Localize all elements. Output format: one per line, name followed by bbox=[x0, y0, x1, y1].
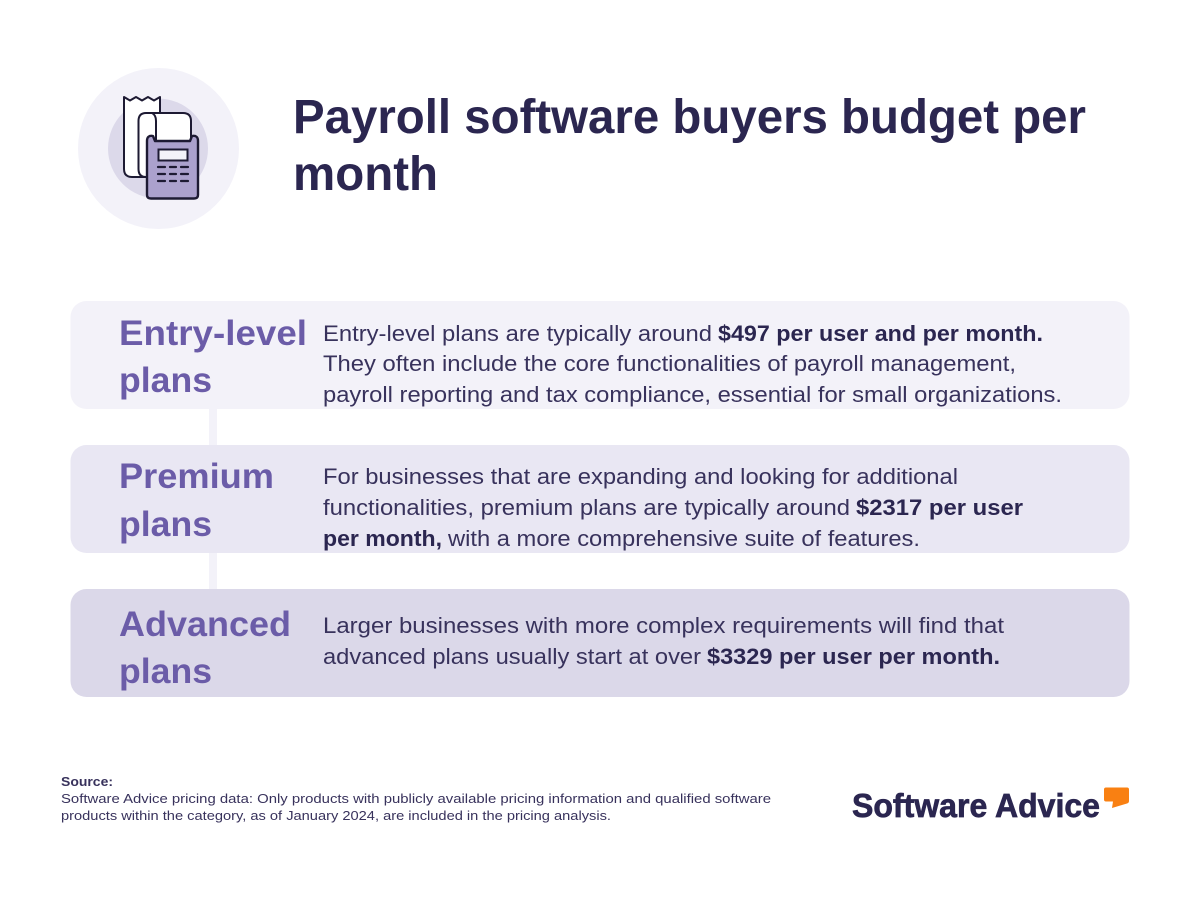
connector: premium to advanced bbox=[209, 549, 217, 593]
text: premium description: $2317 per user bbox=[856, 495, 1023, 520]
text: advanced description: $3329 per user per month. bbox=[707, 644, 1000, 669]
heading: advanced plans bbox=[119, 605, 291, 691]
text: entry-level description: Entry-level plans are typically around bbox=[323, 321, 712, 346]
logo: Software Advice: Software Advice bbox=[852, 787, 1100, 824]
text: premium description: For businesses that are expanding and looking for additional bbox=[323, 464, 958, 489]
title: month bbox=[293, 148, 438, 201]
panel: advanced plans bbox=[70, 589, 1130, 697]
heading: entry-level plans bbox=[119, 314, 307, 400]
icon: orange speech bubble bbox=[1104, 788, 1129, 808]
heading: entry-level plans: Entry-level bbox=[119, 314, 307, 353]
text: advanced description: Larger businesses with more complex requirements will find that bbox=[323, 613, 1004, 638]
heading: premium plans: plans bbox=[119, 505, 212, 544]
source note: Software Advice pricing data: Only products with publicly available pricing information and qualified software bbox=[61, 791, 771, 806]
text: premium description: with a more comprehensive suite of features. bbox=[447, 526, 920, 551]
source note: products within the category, as of January 2024, are included in the pricing analysis. bbox=[61, 808, 611, 823]
text: advanced description bbox=[323, 613, 1004, 669]
source note bbox=[61, 774, 771, 823]
title bbox=[293, 91, 1086, 201]
panel: premium plans bbox=[70, 445, 1130, 553]
source note: Source: bbox=[61, 774, 113, 789]
text: entry-level description: They often include the core functionalities of payroll management, bbox=[323, 351, 1016, 376]
text: premium description bbox=[323, 464, 1023, 551]
text: entry-level description bbox=[323, 321, 1062, 407]
heading: premium plans: Premium bbox=[119, 457, 274, 496]
title: Payroll software buyers budget per bbox=[293, 91, 1086, 144]
panel: entry-level plans bbox=[70, 301, 1130, 409]
text: advanced description: advanced plans usually start at over bbox=[323, 644, 701, 669]
heading: entry-level plans: plans bbox=[119, 361, 212, 400]
text: entry-level description: $497 per user and per month. bbox=[718, 321, 1043, 346]
heading: advanced plans: plans bbox=[119, 652, 212, 691]
heading: advanced plans: Advanced bbox=[119, 605, 291, 644]
text: entry-level description: payroll reporting and tax compliance, essential for small organizations. bbox=[323, 382, 1062, 407]
connector: entry to premium bbox=[209, 405, 217, 449]
icon: receipt and payment terminal bbox=[78, 68, 239, 229]
heading: premium plans bbox=[119, 457, 274, 544]
text: premium description: per month, bbox=[323, 526, 442, 551]
text: premium description: functionalities, premium plans are typically around bbox=[323, 495, 850, 520]
